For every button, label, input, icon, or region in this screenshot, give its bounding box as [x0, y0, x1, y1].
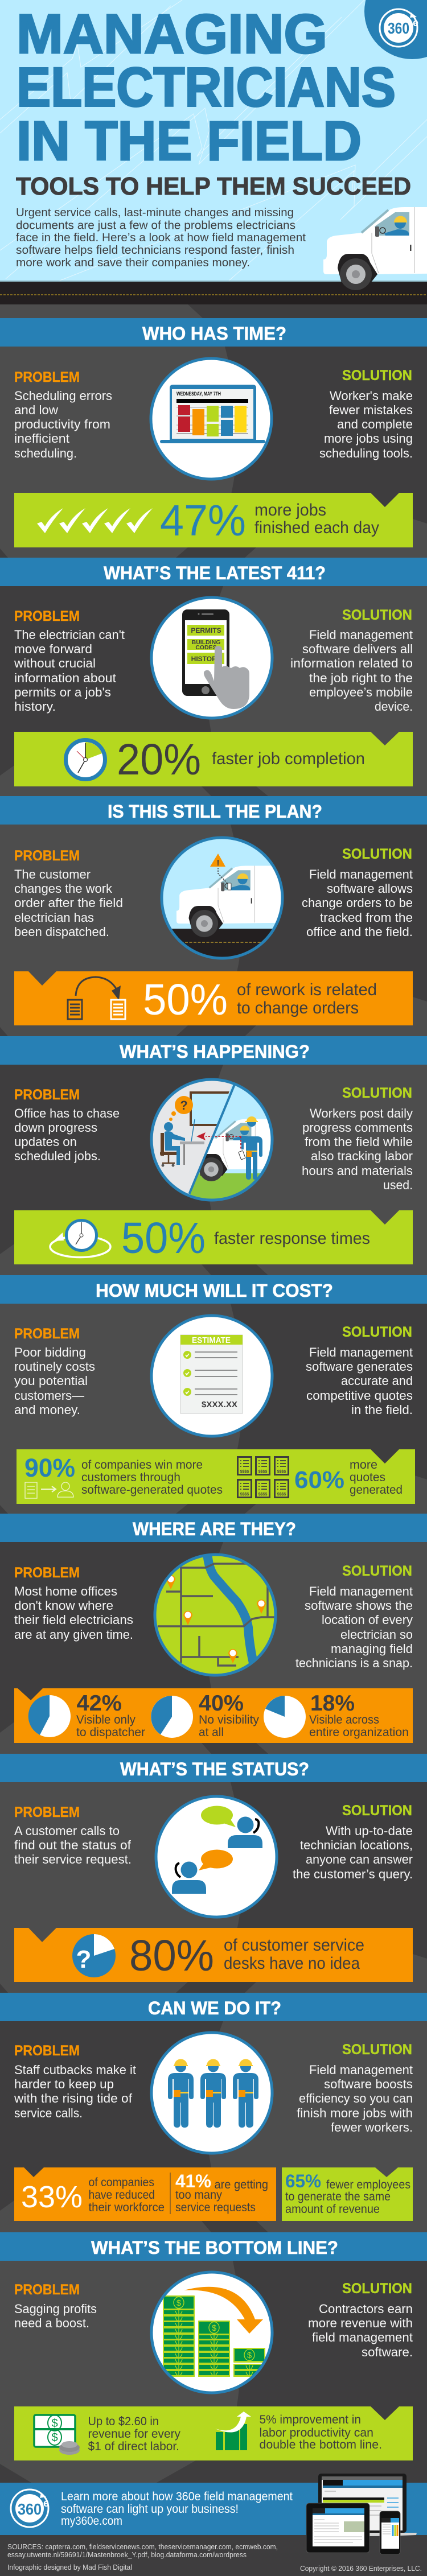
logo badge: 360	[388, 19, 409, 37]
sources and credits: Infographic designed by Mad Fish Digital	[7, 2563, 132, 2571]
icon: phone conversation	[156, 1796, 277, 1917]
icon: clock with return arrow	[50, 1220, 110, 1258]
icon: cash and coins	[34, 2415, 80, 2455]
problem text: PROBLEM	[14, 1565, 80, 1581]
solution text: the customer’s query.	[293, 1867, 413, 1881]
stat: 47%: finished each day	[254, 518, 379, 537]
solution text: information related to	[290, 656, 413, 670]
problem text: Scheduling errors	[14, 389, 112, 403]
stat: 33% and 41%: their workforce	[89, 2200, 165, 2214]
problem text: PROBLEM	[14, 1326, 80, 1342]
stat: 33% and 41%: 41%	[175, 2171, 211, 2191]
stat: 65%	[282, 2167, 413, 2221]
solution text: Field management	[309, 867, 413, 881]
worker in field	[239, 1116, 262, 1180]
problem text: information about	[14, 671, 116, 685]
problem text: Office has to chase	[14, 1106, 120, 1120]
icon: truck with alert	[161, 836, 284, 959]
stat: 33% and 41%: are getting	[214, 2178, 268, 2191]
stat: 20%: 20%	[117, 735, 201, 784]
solution text: SOLUTION	[342, 368, 412, 384]
problem text: The customer	[14, 867, 91, 881]
panel: latest 411	[0, 558, 427, 786]
icon: phone and hand: CODES	[195, 644, 217, 651]
problem text: A customer calls to	[14, 1824, 120, 1838]
stat: 33% and 41%: have reduced	[89, 2188, 155, 2202]
icon: truck with alert: !	[216, 858, 220, 868]
solution text: software shows the	[305, 1598, 413, 1613]
problem text: customers—	[14, 1388, 84, 1403]
solution text: software generates	[306, 1359, 413, 1374]
pie: 80%: ?	[76, 1946, 91, 1973]
panel: what's the status	[0, 1754, 427, 1982]
intro text: software helps field technicians respond faster, finish	[16, 244, 294, 257]
intro text: documents are just a few of the problems electricians	[16, 220, 295, 232]
stat: 90% and 60%: quotes	[350, 1470, 385, 1484]
stat: 65%: fewer employees	[326, 2178, 410, 2191]
problem text: updates on	[14, 1135, 77, 1149]
heading	[0, 558, 427, 586]
sources and credits: essay.utwente.nl/59691/1/Mastenbroek_Y.pdf, blog.dataforma.com/wordpress	[7, 2551, 247, 2559]
pie: 40%: No visibility	[199, 1713, 259, 1726]
call to action text: software can light up your business!	[61, 2503, 239, 2516]
problem text: PROBLEM	[14, 2043, 80, 2059]
panel: bottom line	[0, 2232, 427, 2460]
logo badge: e	[413, 17, 418, 28]
icon: estimate sheet: $XXX.XX	[202, 1400, 237, 1409]
problem text: you potential	[14, 1374, 88, 1388]
stat: 90% and 60%: customers through	[81, 1470, 180, 1484]
solution text: Field management	[309, 1584, 413, 1598]
stat: revenue and productivity: 5% improvement in	[260, 2413, 361, 2426]
stat: 90% and 60%	[17, 1449, 415, 1504]
solution text: more revenue with	[308, 2316, 413, 2330]
logo: e	[43, 2497, 49, 2509]
problem text	[14, 2043, 136, 2120]
problem text: are at any given time.	[14, 1627, 133, 1642]
problem text: move forward	[14, 642, 92, 656]
problem text	[14, 1326, 95, 1417]
solution text	[295, 1563, 413, 1670]
title: IN THE FIELD	[17, 110, 362, 172]
problem text: Poor bidding	[14, 1345, 86, 1359]
heading: WHAT’S THE LATEST 411?	[104, 563, 326, 583]
solution text: fewer mistakes	[329, 403, 413, 417]
icon: rising bars	[215, 2412, 251, 2450]
stat: 90% and 60%: 90%	[24, 1453, 75, 1482]
solution text: Field management	[309, 2063, 413, 2077]
solution text: managing field	[331, 1642, 413, 1656]
problem text: electrician has	[14, 910, 94, 925]
solution text: hours and materials	[302, 1164, 413, 1178]
problem text: PROBLEM	[14, 2282, 80, 2298]
solution text	[290, 607, 413, 714]
panel: footer call to action	[0, 2474, 427, 2554]
stat: 20%: faster job completion	[212, 749, 365, 768]
sources and credits: Copyright © 2016 360 Enterprises, LLC.	[300, 2565, 422, 2573]
icon: check marks	[37, 508, 153, 533]
pie: 42%: to dispatcher	[76, 1725, 145, 1739]
road	[0, 281, 427, 304]
heading	[0, 1275, 427, 1304]
problem text: harder to keep up	[14, 2077, 114, 2091]
stat: 80%: of customer service	[224, 1936, 364, 1955]
pie: 42%: 42%	[76, 1691, 122, 1716]
problem text: PROBLEM	[14, 848, 80, 864]
solution text: SOLUTION	[342, 1324, 412, 1340]
solution text: field management	[312, 2330, 413, 2344]
icon: estimate sheet	[151, 1316, 272, 1436]
problem text: and low	[14, 403, 58, 417]
stat: 50% rework: to change orders	[237, 999, 359, 1017]
solution text: and complete	[337, 417, 413, 431]
stat: revenue and productivity: revenue for every	[88, 2427, 180, 2441]
intro text: Urgent service calls, last-minute changes and missing	[16, 207, 294, 219]
heading: WHAT’S THE BOTTOM LINE?	[91, 2237, 338, 2258]
icon: tablet device	[306, 2503, 369, 2553]
icon: cash and coins: $	[51, 2417, 58, 2430]
pie: 18%: 18%	[310, 1691, 355, 1716]
solution text: change orders to be	[302, 896, 413, 910]
panel: still the plan	[0, 796, 427, 1025]
solution text: employee’s mobile	[309, 685, 413, 699]
solution text: Field management	[309, 628, 413, 642]
solution text: SOLUTION	[342, 2042, 412, 2058]
solution text: anyone can answer	[306, 1852, 413, 1866]
stat: 50% response	[14, 1210, 413, 1264]
solution text: also tracking labor	[311, 1149, 413, 1163]
heading	[0, 2232, 427, 2261]
problem text: with the rising tide of	[14, 2091, 133, 2105]
heading	[0, 1993, 427, 2021]
sources and credits: SOURCES: capterra.com, fieldservicenews.com, theservicemanager.com, ecmweb.com,	[7, 2543, 278, 2551]
stat: 80%	[14, 1928, 413, 1982]
stat: 65%: amount of revenue	[285, 2202, 380, 2216]
heading: WHERE ARE THEY?	[133, 1519, 296, 1539]
logo badge	[364, 0, 427, 59]
intro text: more work and save their companies money.	[16, 257, 250, 269]
problem text: Staff cutbacks make it	[14, 2063, 136, 2077]
problem text	[14, 1565, 133, 1642]
problem text: PROBLEM	[14, 1087, 80, 1103]
solution text: fewer workers.	[331, 2120, 413, 2134]
heading	[0, 318, 427, 347]
problem text: service calls.	[14, 2106, 83, 2120]
problem text	[14, 608, 125, 714]
solution text: software.	[362, 2345, 413, 2359]
solution text: finish more jobs with	[297, 2106, 413, 2120]
sources and credits	[7, 2543, 422, 2573]
problem text	[14, 1804, 132, 1866]
problem text: and money.	[14, 1403, 80, 1417]
stat: 33% and 41%: of companies	[89, 2175, 154, 2189]
icon: quote to customer	[25, 1482, 73, 1498]
stat: 33% and 41%	[14, 2167, 276, 2221]
solution text	[319, 368, 413, 460]
heading: HOW MUCH WILL IT COST?	[96, 1280, 333, 1301]
icon: shrinking money stacks	[151, 2272, 272, 2393]
problem text: down progress	[14, 1120, 97, 1135]
solution text: software delivers all	[302, 642, 413, 656]
stat: 33% and 41%: 33%	[21, 2180, 83, 2214]
worker in office	[160, 1096, 204, 1167]
stat: revenue and productivity: Up to $2.60 in	[88, 2414, 159, 2428]
icon: truck	[323, 207, 427, 290]
solution text	[293, 1803, 413, 1881]
icon: quote documents	[238, 1457, 288, 1498]
stat: 47%: 47%	[160, 496, 246, 545]
pie: 80%	[72, 1934, 116, 1977]
icon: laptop device	[310, 2474, 417, 2536]
title	[17, 3, 396, 172]
problem text: PROBLEM	[14, 1804, 80, 1820]
stat: 20%	[14, 732, 413, 786]
worker in office: ?	[180, 1098, 188, 1112]
solution text: With up-to-date	[326, 1824, 413, 1838]
heading: WHAT’S HAPPENING?	[120, 1041, 310, 1062]
icon: estimate sheet: ESTIMATE	[192, 1336, 231, 1345]
solution text: used.	[383, 1178, 413, 1192]
problem text: scheduled jobs.	[14, 1149, 101, 1163]
solution text: SOLUTION	[342, 2281, 412, 2297]
problem text: permits or a job's	[14, 685, 111, 699]
solution text	[308, 2281, 413, 2359]
panel: can we do it	[0, 1993, 427, 2221]
stat: 50% rework: 50%	[143, 975, 228, 1024]
pie: 42%: Visible only	[76, 1713, 136, 1726]
solution text	[302, 1085, 413, 1192]
solution text: SOLUTION	[342, 607, 412, 623]
problem text: Sagging profits	[14, 2302, 97, 2316]
problem text	[14, 1087, 120, 1163]
solution text: device.	[375, 699, 413, 714]
solution text: software boosts	[324, 2077, 413, 2091]
title: MANAGING	[17, 3, 327, 65]
solution text	[302, 846, 413, 939]
panel: how much will it cost	[0, 1275, 427, 1504]
solution text: competitive quotes	[306, 1388, 413, 1403]
solution text: tracked from the	[320, 910, 413, 925]
pie: 40%	[151, 1691, 259, 1739]
stat: 33% and 41%: service requests	[175, 2200, 256, 2214]
solution text: software allows	[327, 881, 413, 896]
stat: revenue and productivity: labor productivity can	[260, 2426, 373, 2439]
problem text: The electrician can't	[14, 628, 125, 642]
stat: 65%: 65%	[285, 2171, 321, 2191]
stat: 80%: 80%	[129, 1931, 214, 1980]
logo	[11, 2490, 49, 2527]
icon: phone device	[380, 2511, 400, 2554]
solution text: in the field.	[351, 1403, 413, 1417]
call to action text: Learn more about how 360e field management	[61, 2490, 293, 2503]
pie: 18%: entire organization	[309, 1725, 409, 1739]
solution text: office and the field.	[306, 925, 413, 939]
problem text: their field electricians	[14, 1613, 133, 1627]
icon: phone and hand: PERMITS	[191, 627, 221, 634]
stat: revenue and productivity: double the bottom line.	[260, 2438, 382, 2451]
stat: visibility pies	[14, 1688, 413, 1743]
problem text: order after the field	[14, 896, 123, 910]
problem text: PROBLEM	[14, 369, 80, 385]
call to action text: my360e.com	[61, 2515, 122, 2528]
heading	[0, 1514, 427, 1542]
stat: 65%: to generate the same	[285, 2190, 391, 2203]
problem text: don't know where	[14, 1598, 113, 1613]
icon: change order documents	[68, 977, 125, 1019]
heading: IS THIS STILL THE PLAN?	[108, 801, 322, 822]
heading	[0, 1036, 427, 1065]
pie: 40%: at all	[199, 1725, 224, 1739]
pie: 42%	[28, 1691, 145, 1739]
call to action text	[61, 2490, 293, 2528]
problem text: changes the work	[14, 881, 113, 896]
stat: revenue and productivity	[14, 2406, 413, 2460]
solution text: Contractors earn	[319, 2302, 413, 2316]
stat: 80%: desks have no idea	[224, 1954, 360, 1973]
icon: office and field split scene	[150, 1078, 273, 1202]
icon: three workers	[151, 2033, 272, 2153]
heading	[0, 796, 427, 825]
solution text: SOLUTION	[342, 846, 412, 862]
heading	[0, 1754, 427, 1782]
solution text: technician locations,	[300, 1838, 413, 1852]
problem text: find out the status of	[14, 1838, 132, 1852]
solution text: SOLUTION	[342, 1085, 412, 1101]
stat: 50% response: 50%	[121, 1214, 206, 1263]
solution text	[306, 1324, 413, 1417]
solution text: SOLUTION	[342, 1803, 412, 1819]
pie: 18%: Visible across	[309, 1713, 379, 1726]
solution text: location of every	[322, 1613, 413, 1627]
heading: CAN WE DO IT?	[148, 1998, 281, 2018]
stat: 90% and 60%: 60%	[294, 1466, 344, 1494]
problem text	[14, 2282, 97, 2330]
problem text: their service request.	[14, 1852, 132, 1866]
solution text: scheduling tools.	[319, 446, 413, 460]
icon: phone and hand: HISTORY	[191, 655, 221, 663]
solution text: efficiency so you can	[299, 2091, 413, 2105]
subtitle: TOOLS TO HELP THEM SUCCEED	[16, 172, 411, 200]
logo: 360	[18, 2500, 42, 2518]
intro text	[16, 207, 306, 269]
stat: 50% rework	[14, 971, 413, 1025]
problem text: need a boost.	[14, 2316, 89, 2330]
solution text: Worker's make	[330, 389, 413, 403]
solution text: electrician so	[340, 1627, 413, 1642]
stat: 90% and 60%: more	[350, 1458, 377, 1472]
problem text: without crucial	[14, 656, 96, 670]
solution text: Workers post daily	[310, 1106, 413, 1120]
problem text: PROBLEM	[14, 608, 80, 624]
solution text: Field management	[309, 1345, 413, 1359]
solution text: technicians is a snap.	[295, 1656, 413, 1670]
stat: 90% and 60%: of companies win more	[81, 1458, 203, 1472]
pie: 40%: 40%	[199, 1691, 244, 1716]
heading: WHO HAS TIME?	[142, 323, 286, 344]
panel: where are they	[0, 1514, 427, 1743]
problem text: inefficient	[14, 431, 69, 446]
solution text: more jobs using	[324, 431, 413, 446]
stat: 50% rework: of rework is related	[237, 980, 377, 999]
problem text: history.	[14, 699, 56, 714]
panel: who has time	[0, 318, 427, 547]
icon: phone and hand: BUILDING	[192, 639, 220, 646]
stat: 90% and 60%: software-generated quotes	[81, 1483, 223, 1497]
stat: 90% and 60%: generated	[350, 1483, 403, 1497]
solution text: SOLUTION	[342, 1563, 412, 1579]
solution text: accurate and	[341, 1374, 413, 1388]
icon: clock	[66, 740, 105, 780]
icon: phone and hand	[151, 597, 272, 718]
problem text: been dispatched.	[14, 925, 109, 939]
problem text	[14, 848, 123, 939]
problem text	[14, 369, 112, 460]
icon: cash and coins: $	[51, 2431, 58, 2444]
icon: laptop schedule	[151, 358, 272, 479]
intro text: face in the field. Here’s a look at how field management	[16, 232, 306, 244]
stat: 50% response: faster response times	[214, 1229, 370, 1248]
title: ELECTRICIANS	[17, 56, 396, 118]
stat: 47%	[14, 493, 413, 547]
stat: 33% and 41%: too many	[175, 2188, 222, 2202]
problem text: productivity from	[14, 417, 110, 431]
problem text: scheduling.	[14, 446, 77, 460]
icon: laptop schedule: WEDNESDAY, MAY 7TH	[176, 391, 221, 397]
solution text	[297, 2042, 413, 2134]
solution text: the job right to the	[309, 671, 413, 685]
pie: 18%	[264, 1691, 409, 1739]
problem text: Most home offices	[14, 1584, 117, 1598]
red dashed arrow	[196, 1132, 241, 1149]
heading: WHAT’S THE STATUS?	[120, 1759, 309, 1779]
problem text: routinely costs	[14, 1359, 95, 1374]
solution text: progress comments	[302, 1120, 413, 1135]
icon: map with pins	[155, 1552, 276, 1679]
stat: revenue and productivity: $1 of direct labor.	[88, 2439, 179, 2453]
stat: 47%: more jobs	[254, 501, 326, 520]
panel: header	[0, 0, 427, 304]
solution text: from the field while	[305, 1135, 413, 1149]
panel: what's happening	[0, 1036, 427, 1264]
